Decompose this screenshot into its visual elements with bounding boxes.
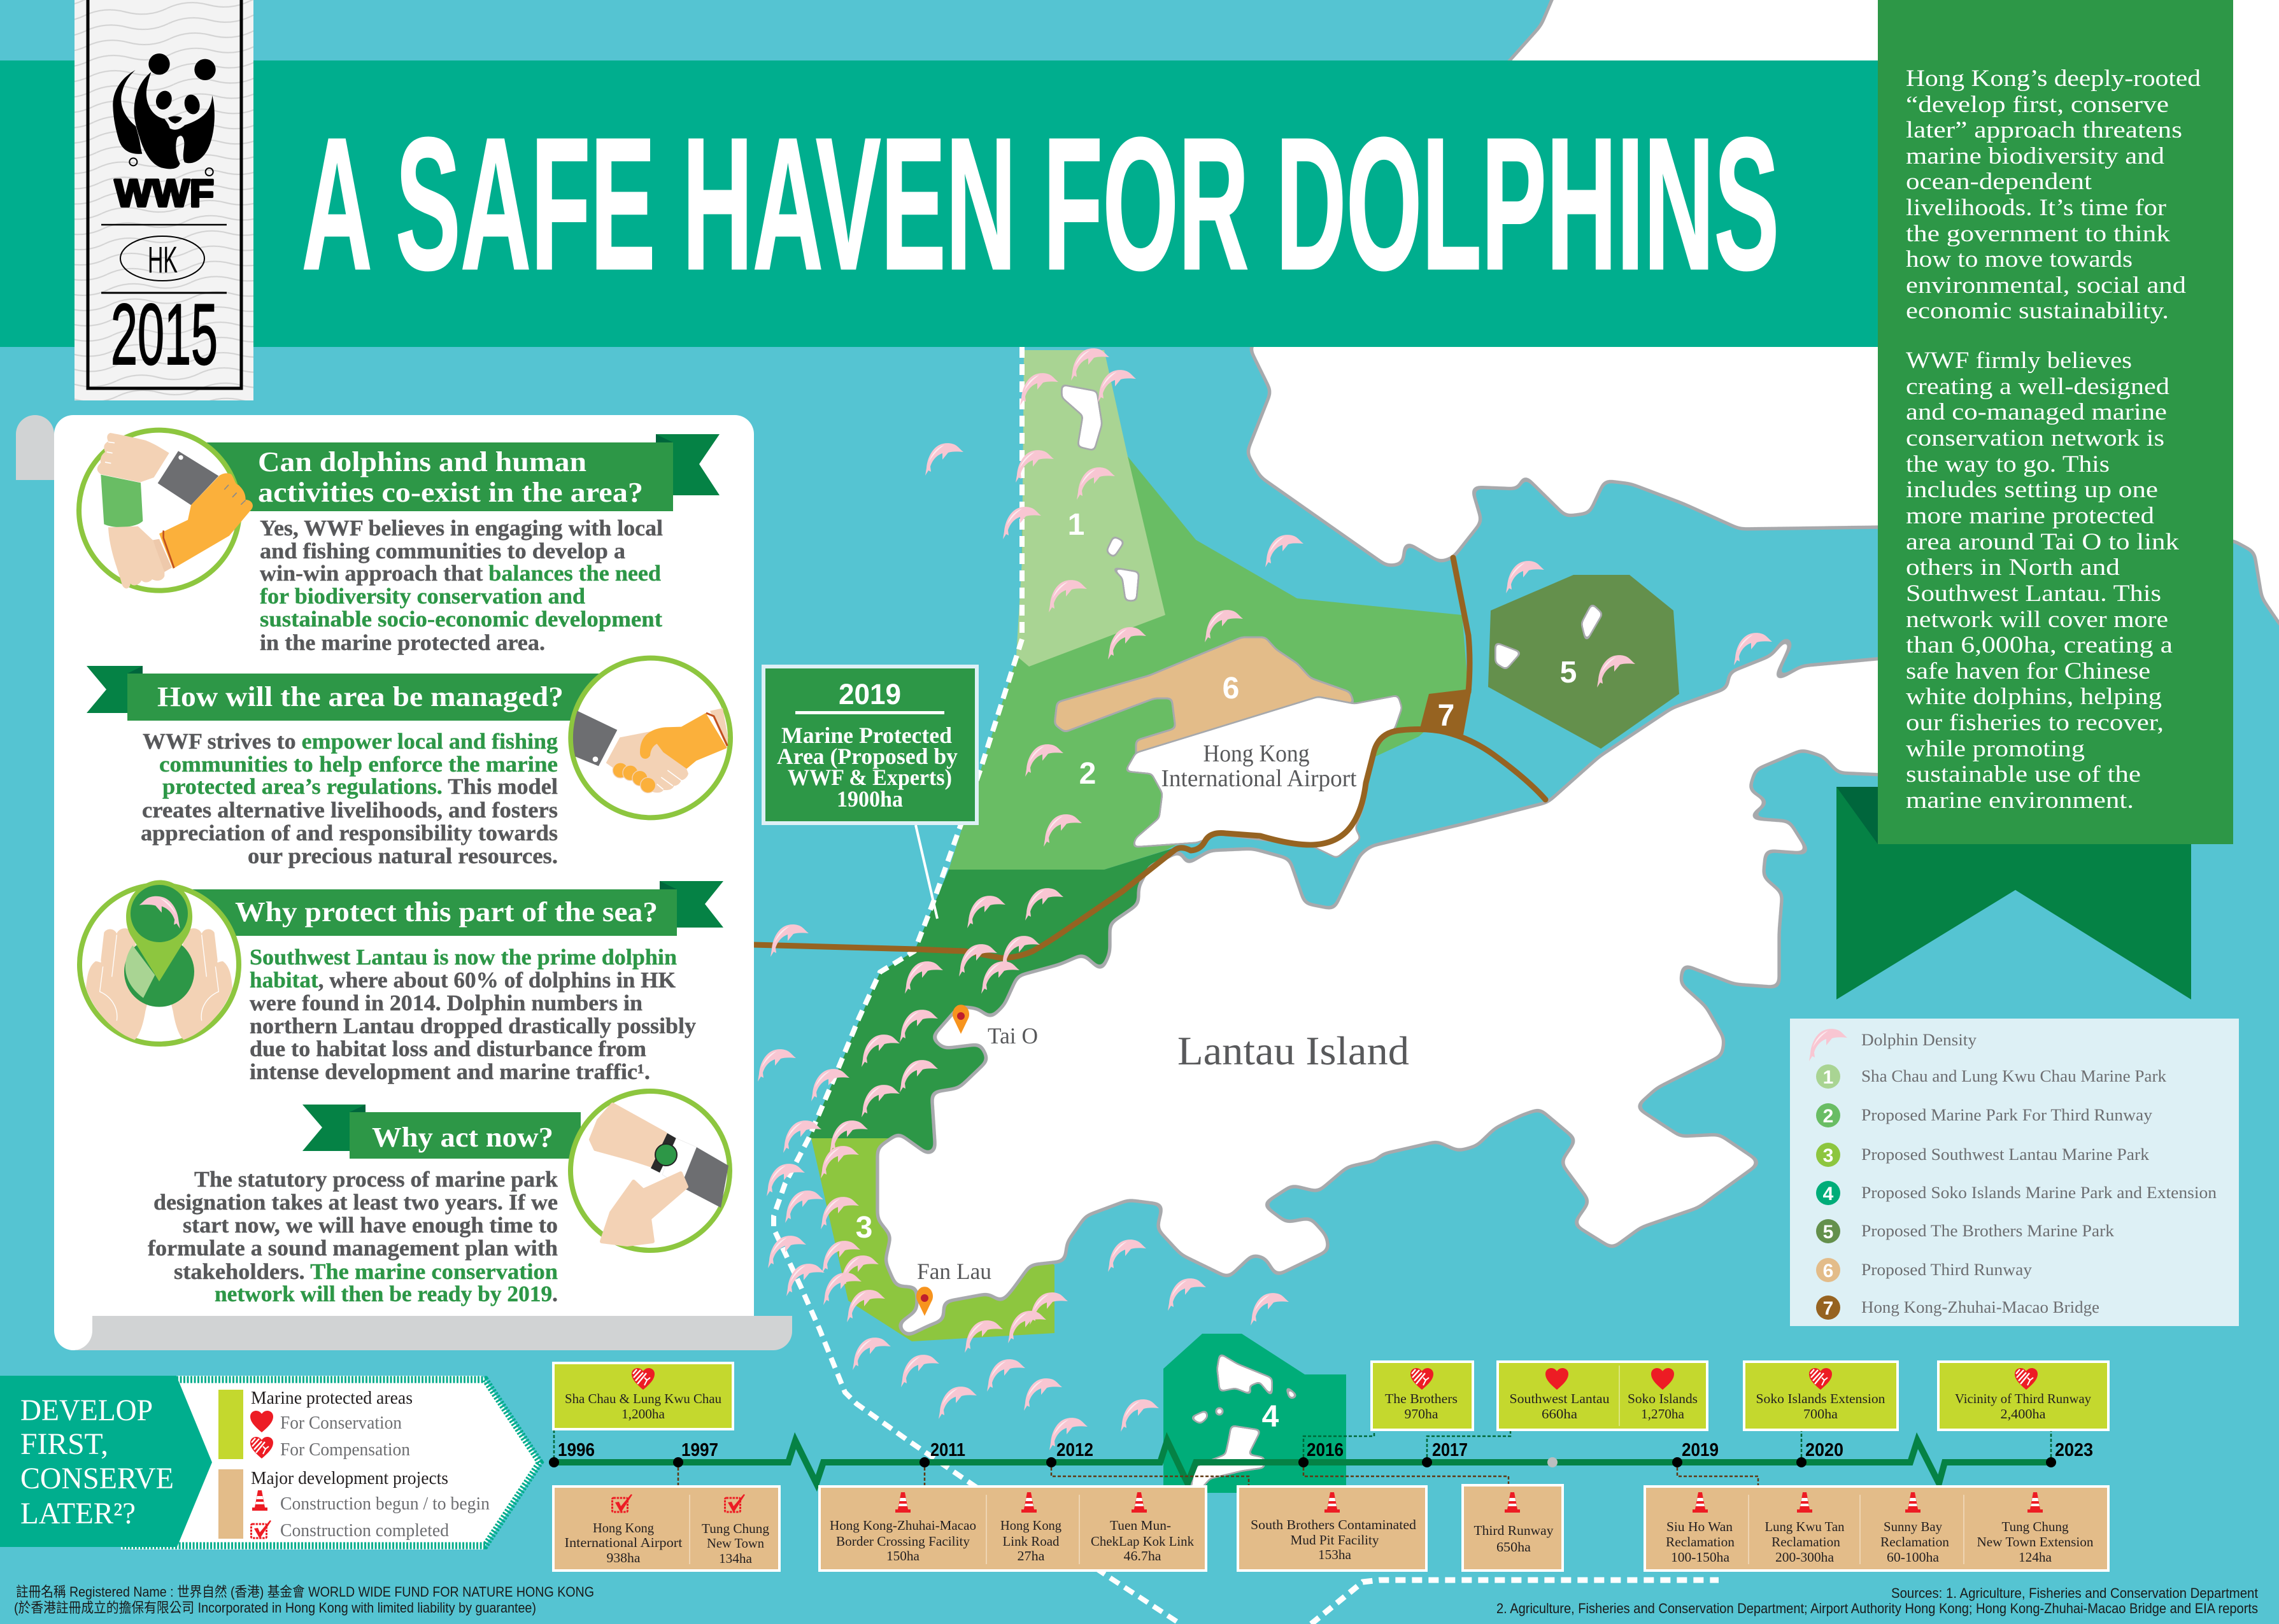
Lantau Island label: Lantau Island xyxy=(1177,1028,1409,1073)
body text: start now, we will have enough time to xyxy=(183,1213,558,1238)
marine box: Sha Chau and Lung Kwu Chau: 1,200ha xyxy=(621,1406,665,1422)
paragraph: conservation network: area around Tai O to link xyxy=(1906,529,2180,555)
major development projects key: Construction completed xyxy=(280,1521,449,1541)
title band xyxy=(0,60,1878,347)
heading: How will the area be managed? xyxy=(157,681,564,712)
year markers: 2020 xyxy=(1805,1440,1843,1460)
development box: Third Runway: 650ha xyxy=(1496,1539,1531,1555)
development box: HZMB facility, Link Road and TM-CLK Link: Tuen Mun- xyxy=(1110,1518,1171,1533)
body text: The statutory process of marine park xyxy=(194,1167,558,1192)
zone 1: Sha Chau and Lung Kwu Chau marine park xyxy=(1016,350,1165,667)
major development projects key: Construction begun / to begin xyxy=(280,1494,490,1514)
legend: item 3: 3 xyxy=(1823,1145,1833,1166)
major development projects key xyxy=(218,1469,490,1541)
scroll curl: top tab xyxy=(16,415,54,480)
paragraph: conservation network: others in North and xyxy=(1906,554,2120,581)
paragraph: conservation network: marine environment. xyxy=(1906,787,2134,814)
development box: reclamations and Tung Chung extension: 60-100ha xyxy=(1887,1550,1940,1565)
body text xyxy=(250,945,697,1084)
legend chevron background xyxy=(121,1376,541,1550)
callout: 2019 marine protected area: Area (Proposed by xyxy=(777,744,958,769)
body text xyxy=(141,729,558,868)
Hong Kong International Airport island xyxy=(1126,696,1402,858)
paragraph: conservation network: white dolphins, helping xyxy=(1906,684,2162,710)
development box: reclamations and Tung Chung extension xyxy=(1645,1486,2108,1571)
marine box: Southwest Lantau and Soko Islands: Soko Islands xyxy=(1628,1391,1698,1406)
icon: panda xyxy=(113,53,216,176)
ribbon banner xyxy=(302,1105,581,1159)
paragraph: conservation network: sustainable use of the xyxy=(1906,761,2141,787)
legend: item 5: Proposed The Brothers Marine Park xyxy=(1861,1222,2114,1240)
paragraph: conservation network: Southwest Lantau. This xyxy=(1906,581,2161,607)
marine box: Vicinity of Third Runway: Vicinity of Third Runway xyxy=(1955,1391,2091,1406)
timeline xyxy=(549,1362,2108,1571)
development box: Third Runway xyxy=(1463,1485,1563,1571)
marine box: Vicinity of Third Runway: 2,400ha xyxy=(2001,1406,2046,1422)
legend: item 5 xyxy=(1816,1219,2114,1243)
paragraph: conservation network: WWF firmly believes xyxy=(1906,348,2132,374)
development box: HZMB facility, Link Road and TM-CLK Link: 27ha xyxy=(1018,1548,1045,1564)
development box: reclamations and Tung Chung extension: 100-150ha xyxy=(1671,1550,1730,1565)
legend: item 5: 5 xyxy=(1823,1222,1833,1243)
heading: Can dolphins and human xyxy=(258,446,586,477)
development box: reclamations and Tung Chung extension: Lung Kwu Tan xyxy=(1765,1519,1845,1534)
body text: in the marine protected area. xyxy=(260,630,545,655)
body text: win-win approach that balances the need xyxy=(260,561,662,586)
year markers: 1997 xyxy=(681,1440,718,1460)
development box: reclamations and Tung Chung extension: New Town Extension xyxy=(1977,1534,2094,1550)
dolphin density markers xyxy=(758,348,1772,1450)
WWF logo panel xyxy=(75,0,253,400)
paragraph: develop first: ocean-dependent xyxy=(1906,169,2092,195)
Fan Lau label: Fan Lau xyxy=(917,1259,991,1284)
ribbon banner xyxy=(191,881,723,936)
paragraph: develop first: later” approach threatens xyxy=(1906,117,2182,143)
development box: reclamations and Tung Chung extension: Reclamation xyxy=(1771,1534,1840,1550)
zone 5: proposed The Brothers marine park xyxy=(1488,575,1679,749)
development box: South Brothers mud pit xyxy=(1238,1486,1426,1571)
Hong Kong-Zhuhai-Macao Bridge route xyxy=(753,558,1545,958)
marine box: Soko Islands Extension: Soko Islands Extension xyxy=(1756,1391,1885,1406)
paragraph: develop first: livelihoods. It’s time for xyxy=(1906,195,2166,221)
development box: airport and Tung Chung: 938ha xyxy=(606,1550,641,1565)
section 2: how will the area be managed xyxy=(87,658,730,868)
year markers: 2011 xyxy=(930,1440,965,1460)
legend: item 7 xyxy=(1816,1296,2099,1320)
ribbon banner xyxy=(206,434,720,511)
body text: northern Lantau dropped drastically possibly xyxy=(250,1013,697,1038)
paragraph: conservation network xyxy=(1906,348,2180,814)
marine box: The Brothers: The Brothers xyxy=(1385,1391,1458,1406)
islands in zones 1, 4 and 5 xyxy=(1062,385,1602,1493)
paragraph: conservation network: the way to go. This xyxy=(1906,451,2110,477)
heading: activities co-exist in the area? xyxy=(258,477,643,508)
Tai O label: Tai O xyxy=(988,1023,1038,1049)
body text: for biodiversity conservation and xyxy=(260,584,586,609)
year markers xyxy=(549,1440,2093,1467)
callout: 2019 marine protected area xyxy=(763,667,977,919)
WWF wordmark: WWF xyxy=(115,172,214,215)
paragraph: conservation network: our fisheries to recover, xyxy=(1906,710,2164,736)
marine box: Southwest Lantau and Soko Islands: 1,270ha xyxy=(1641,1406,1685,1422)
marine box: Southwest Lantau and Soko Islands: Southwest Lantau xyxy=(1509,1391,1610,1406)
legend: item 3 xyxy=(1816,1143,2149,1167)
body text: habitat, where about 60% of dolphins in HK xyxy=(250,968,676,992)
body text xyxy=(260,516,663,655)
icon: hands holding map pin xyxy=(80,880,239,1044)
marine box: Vicinity of Third Runway xyxy=(1938,1362,2108,1430)
icon: hand pointing at wristwatch xyxy=(571,1091,730,1250)
HK badge xyxy=(120,236,204,281)
zone number labels: 4 xyxy=(1262,1400,1279,1434)
development box: reclamations and Tung Chung extension: 200-300ha xyxy=(1775,1550,1835,1565)
body text xyxy=(148,1167,558,1306)
paragraph: conservation network: conservation network is xyxy=(1906,425,2164,451)
paragraph: develop first: the government to think xyxy=(1906,221,2171,247)
paragraph: conservation network: and co-managed marine xyxy=(1906,399,2167,425)
development box: reclamations and Tung Chung extension: 124ha xyxy=(2019,1550,2052,1565)
ribbon banner xyxy=(87,666,602,721)
northern coastline land xyxy=(1247,0,2279,662)
body text: were found in 2014. Dolphin numbers in xyxy=(250,991,643,1015)
legend: item 2: 2 xyxy=(1823,1106,1833,1127)
marine box: Soko Islands Extension: 700ha xyxy=(1803,1406,1838,1422)
footer: sources xyxy=(1496,1585,2258,1616)
paragraph: conservation network: more marine protected xyxy=(1906,503,2155,529)
paragraph: develop first: marine biodiversity and xyxy=(1906,143,2165,169)
paragraph: conservation network: safe haven for Chinese xyxy=(1906,658,2150,684)
dashed marine boundary, southern section xyxy=(1311,1580,1719,1624)
body text: sustainable socio-economic development xyxy=(260,607,662,632)
body text: WWF strives to empower local and fishing xyxy=(143,729,558,754)
airport label xyxy=(1161,740,1357,792)
paragraph: develop first: environmental, social and xyxy=(1906,272,2187,299)
body text: creates alternative livelihoods, and fosters xyxy=(142,798,558,823)
development box: airport and Tung Chung xyxy=(553,1486,779,1571)
section 3: why protect this part of the sea xyxy=(80,880,723,1084)
marine protected areas key xyxy=(218,1388,413,1460)
legend: item 2: Proposed Marine Park For Third Runway xyxy=(1861,1106,2152,1124)
zone number labels: 2 xyxy=(1079,757,1096,791)
development box: reclamations and Tung Chung extension: Sunny Bay xyxy=(1884,1519,1942,1534)
legend: dolphin density xyxy=(1809,1029,1977,1061)
develop first arrow xyxy=(0,1376,212,1547)
development box: HZMB facility, Link Road and TM-CLK Link xyxy=(820,1486,1206,1571)
footer: registered name xyxy=(14,1584,594,1616)
right ribbon xyxy=(1836,787,2191,999)
body text: appreciation of and responsibility towards xyxy=(141,821,558,845)
development box: airport and Tung Chung: New Town xyxy=(707,1536,764,1551)
body text: communities to help enforce the marine xyxy=(159,752,558,777)
zone 4: proposed Soko Islands marine park xyxy=(1163,1334,1346,1493)
year markers: 2012 xyxy=(1056,1440,1093,1460)
heading xyxy=(258,446,643,508)
body text: designation takes at least two years. If we xyxy=(153,1190,558,1215)
legend: item 1: Sha Chau and Lung Kwu Chau Marine Park xyxy=(1861,1067,2166,1085)
legend: item 4: Proposed Soko Islands Marine Park and Extension xyxy=(1861,1183,2217,1202)
body text: due to habitat loss and disturbance from xyxy=(250,1036,646,1061)
left scroll panel xyxy=(16,415,792,1350)
development box: reclamations and Tung Chung extension: Reclamation xyxy=(1880,1534,1949,1550)
callout: 2019 marine protected area: WWF & Experts) xyxy=(788,765,952,790)
legend: item 6: Proposed Third Runway xyxy=(1861,1260,2032,1279)
paragraph: develop first: “develop first, conserve xyxy=(1906,92,2169,118)
zone number labels: 1 xyxy=(1068,508,1084,542)
footer: registered name: (於香港註冊成立的擔保有限公司 Incorporated in Hong Kong with limited liability by guarantee) xyxy=(14,1600,536,1616)
development box: HZMB facility, Link Road and TM-CLK Link: Hong Kong xyxy=(1000,1518,1061,1533)
question heading: DEVELOP xyxy=(20,1394,153,1427)
body text: intense development and marine traffic¹. xyxy=(250,1059,650,1084)
zone number labels: 5 xyxy=(1560,656,1577,689)
marine box: Sha Chau and Lung Kwu Chau xyxy=(553,1363,733,1429)
body text: network will then be ready by 2019. xyxy=(215,1282,558,1306)
legend entries xyxy=(1809,1029,2217,1320)
development box: HZMB facility, Link Road and TM-CLK Link: ChekLap Kok Link xyxy=(1091,1534,1194,1549)
callout: 2019 marine protected area: 2019 xyxy=(839,678,901,710)
heading: Why protect this part of the sea? xyxy=(235,896,658,928)
marine box: Sha Chau and Lung Kwu Chau: Sha Chau & Lung Kwu Chau xyxy=(565,1391,721,1406)
development box: HZMB facility, Link Road and TM-CLK Link: 150ha xyxy=(886,1548,920,1564)
body text: protected area’s regulations. This model xyxy=(162,774,558,799)
paragraph: develop first: Hong Kong’s deeply-rooted xyxy=(1906,66,2201,92)
development box: HZMB facility, Link Road and TM-CLK Link: Border Crossing Facility xyxy=(836,1534,970,1549)
icon: handshake xyxy=(571,658,730,817)
scroll curl: bottom tab xyxy=(76,1316,792,1350)
development box: airport and Tung Chung: 134ha xyxy=(719,1551,753,1566)
legend: item 7: Hong Kong-Zhuhai-Macao Bridge xyxy=(1861,1298,2099,1317)
year markers: 2023 xyxy=(2055,1440,2093,1460)
development box: HZMB facility, Link Road and TM-CLK Link: 46.7ha xyxy=(1123,1548,1161,1564)
legend: dolphin density: Dolphin Density xyxy=(1861,1031,1977,1049)
development box: South Brothers mud pit: 153ha xyxy=(1318,1547,1352,1562)
body text: our precious natural resources. xyxy=(248,844,558,868)
development box: airport and Tung Chung: Tung Chung xyxy=(702,1521,769,1536)
Lantau Island land xyxy=(877,637,1910,1336)
paragraph: conservation network: creating a well-designed xyxy=(1906,374,2170,400)
location pin: Fan Lau xyxy=(916,1287,933,1316)
airport label: Hong Kong xyxy=(1203,740,1309,767)
development box: HZMB facility, Link Road and TM-CLK Link: Hong Kong-Zhuhai-Macao xyxy=(830,1518,976,1533)
development box: reclamations and Tung Chung extension: Siu Ho Wan xyxy=(1666,1519,1733,1534)
legend: item 2 xyxy=(1816,1103,2152,1127)
zone 6: proposed third runway xyxy=(1054,637,1354,758)
footer: registered name: 註冊名稱 Registered Name : 世界自然 (香港) 基金會 WORLD WIDE FUND FOR NATURE HONG KONG xyxy=(16,1584,594,1600)
zone 7 bridge marker xyxy=(1420,689,1472,735)
paragraph: develop first xyxy=(1906,66,2201,324)
development box: airport and Tung Chung: Hong Kong xyxy=(593,1520,654,1536)
dashed marine boundary xyxy=(774,347,1181,1624)
body text: Southwest Lantau is now the prime dolphin xyxy=(250,945,677,970)
development box: Third Runway: Third Runway xyxy=(1473,1523,1554,1538)
marine box: Southwest Lantau and Soko Islands: 660ha xyxy=(1542,1406,1578,1422)
development box: airport and Tung Chung: International Airport xyxy=(564,1535,683,1550)
right text panel xyxy=(1878,0,2233,844)
zone number labels: 7 xyxy=(1438,699,1454,733)
marine protected areas key: For Compensation xyxy=(280,1440,410,1460)
question heading: LATER²? xyxy=(20,1497,136,1530)
body text: Yes, WWF believes in engaging with local xyxy=(260,516,663,540)
year markers: 2016 xyxy=(1307,1440,1344,1460)
heading: Why act now? xyxy=(372,1122,553,1153)
HK badge: HK xyxy=(148,239,178,281)
callout: 2019 marine protected area: Marine Protected xyxy=(781,723,952,748)
section 4: why act now xyxy=(148,1091,730,1306)
airport label: International Airport xyxy=(1161,765,1357,792)
legend: item 1: 1 xyxy=(1823,1067,1833,1088)
map of Lantau and surrounding waters xyxy=(753,0,2279,1624)
legend: item 1 xyxy=(1816,1064,2166,1089)
marine protected areas key: For Conservation xyxy=(280,1413,402,1433)
marine box: The Brothers xyxy=(1372,1362,1473,1430)
zone number labels: 3 xyxy=(856,1211,872,1245)
connectors xyxy=(554,1430,2051,1485)
year markers: 2019 xyxy=(1682,1440,1719,1460)
timeline axis with breaks xyxy=(554,1441,2051,1483)
marine box: The Brothers: 970ha xyxy=(1405,1406,1438,1422)
paragraph: conservation network: includes setting up one xyxy=(1906,477,2158,503)
legend: item 6: 6 xyxy=(1823,1260,1833,1282)
body text: formulate a sound management plan with xyxy=(148,1236,558,1260)
section 1: can dolphins and humans co-exist xyxy=(79,430,720,655)
body text: stakeholders. The marine conservation xyxy=(174,1259,558,1284)
year: 2015 xyxy=(111,286,218,383)
body text: and fishing communities to develop a xyxy=(260,539,625,563)
question heading: CONSERVE xyxy=(20,1462,174,1495)
legend: item 6 xyxy=(1816,1258,2032,1282)
year markers: 1996 xyxy=(558,1440,595,1460)
zone number labels: 6 xyxy=(1223,672,1239,705)
development box: South Brothers mud pit: South Brothers Contaminated xyxy=(1251,1517,1417,1532)
paragraph: develop first: how to move towards xyxy=(1906,246,2133,272)
development box: reclamations and Tung Chung extension: Reclamation xyxy=(1666,1534,1735,1550)
paragraph: conservation network: while promoting xyxy=(1906,736,2085,762)
legend: item 3: Proposed Southwest Lantau Marine Park xyxy=(1861,1145,2149,1164)
legend: item 4: 4 xyxy=(1823,1183,1834,1204)
footer: sources: Sources: 1. Agriculture, Fisheries and Conservation Department xyxy=(1891,1585,2258,1601)
icon: three linked arms xyxy=(79,430,253,591)
question heading: FIRST, xyxy=(20,1427,108,1461)
marine box: Southwest Lantau and Soko Islands xyxy=(1498,1362,1707,1430)
development box: HZMB facility, Link Road and TM-CLK Link: Link Road xyxy=(1002,1534,1060,1549)
callout: 2019 marine protected area: 1900ha xyxy=(837,786,903,812)
2019 proposed marine protected area xyxy=(809,847,1178,1155)
marine box: Soko Islands Extension xyxy=(1744,1362,1898,1430)
development box: reclamations and Tung Chung extension: Tung Chung xyxy=(2002,1519,2069,1534)
legend: item 4 xyxy=(1816,1181,2217,1205)
development box: South Brothers mud pit: Mud Pit Facility xyxy=(1290,1532,1379,1548)
major development projects key: Major development projects xyxy=(251,1469,448,1488)
legend: item 7: 7 xyxy=(1823,1298,1833,1319)
map legend xyxy=(1790,1019,2239,1326)
paragraph: conservation network: than 6,000ha, creating a xyxy=(1906,632,2173,658)
paragraph: develop first: economic sustainability. xyxy=(1906,298,2169,324)
zone number labels xyxy=(856,508,1577,1434)
zone 2: proposed marine park for third runway xyxy=(949,456,1468,870)
year markers: 2017 xyxy=(1432,1440,1468,1460)
timeline legend arrow xyxy=(0,1376,541,1550)
question heading xyxy=(20,1394,174,1530)
location pin: Tai O xyxy=(953,1005,969,1034)
paragraph: conservation network: network will cover more xyxy=(1906,607,2168,633)
zone 3: proposed Southwest Lantau marine park xyxy=(811,1138,1054,1341)
marine protected areas key: Marine protected areas xyxy=(251,1388,413,1408)
